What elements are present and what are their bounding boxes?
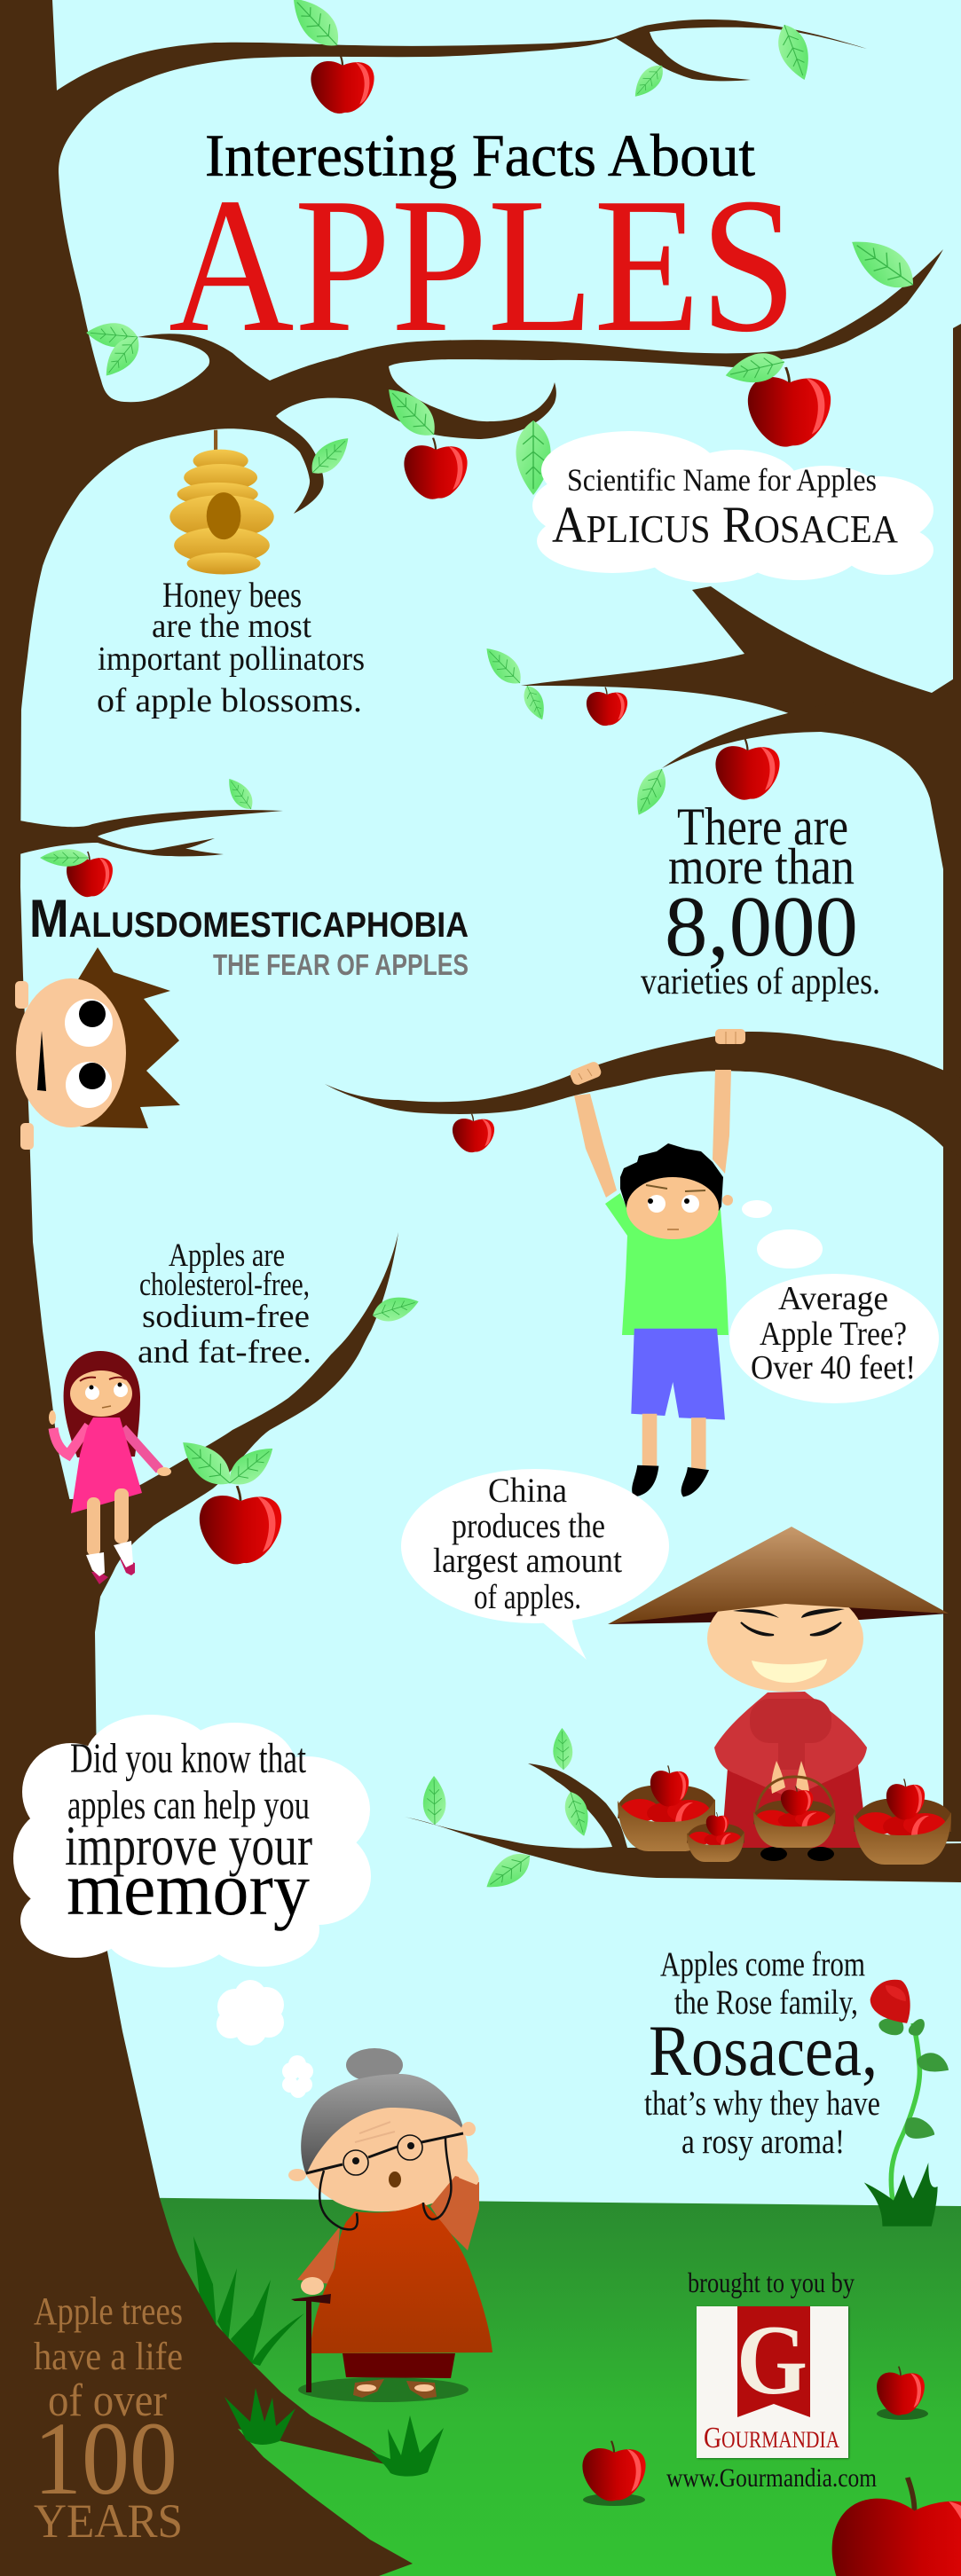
title word: APPLES: APPLES xyxy=(169,159,797,373)
text: apple tree life span: have a life xyxy=(34,2335,183,2378)
text: varieties fact: There are xyxy=(677,797,848,856)
apple on ground: center xyxy=(582,2441,646,2506)
speech bubble: China: largest amount xyxy=(433,1542,622,1580)
text: apple tree life span: 100 xyxy=(34,2400,177,2517)
right side branch with small apple xyxy=(521,324,961,1842)
text: apple tree life span: of over xyxy=(48,2376,167,2426)
text: honey bees fact xyxy=(97,575,365,719)
grass tufts on ground xyxy=(224,2388,444,2477)
text: cholesterol fact: and fat-free. xyxy=(138,1334,311,1370)
leaves on branches xyxy=(40,0,923,1897)
speech bubble: average apple tree: Over 40 feet! xyxy=(751,1349,916,1386)
text: rose family fact: Rosacea, xyxy=(649,2010,878,2091)
apple: boy branch xyxy=(453,1114,494,1152)
title xyxy=(169,122,797,373)
grandmother xyxy=(288,2048,492,2402)
text: honey bees fact: of apple blossoms. xyxy=(97,682,362,719)
text: rose family fact: a rosy aroma! xyxy=(681,2123,845,2161)
Chinese farmer xyxy=(608,1527,949,1861)
text: rose family fact: the Rose family, xyxy=(674,1983,858,2022)
text: cholesterol fact: Apples are xyxy=(169,1237,285,1274)
speech bubble: average apple tree xyxy=(729,1274,939,1403)
Gourmandia logo xyxy=(697,2305,848,2458)
text: Aplicus Rosacea: APLICUS ROSACEA xyxy=(552,496,898,554)
text: rose family fact: that’s why they have xyxy=(644,2085,880,2123)
apple: center branch xyxy=(404,438,468,499)
cloud: scientific name xyxy=(532,431,933,583)
apple: small right branch xyxy=(587,687,627,726)
speech bubble: China: of apples. xyxy=(474,1578,581,1616)
large apple bottom corner xyxy=(832,2478,961,2576)
text: apple tree life span: Apple trees xyxy=(34,2289,183,2333)
heading: Malusdomesticaphobia: MALUSDOMESTICAPHOBIA xyxy=(29,889,469,948)
apple baskets xyxy=(618,1765,951,1865)
text: apple tree life span xyxy=(34,2289,183,2548)
title line: Interesting Facts About: Interesting Facts About xyxy=(205,122,755,189)
speech bubble: average apple tree: Apple Tree? xyxy=(760,1315,907,1353)
apple: girl branch xyxy=(200,1486,281,1564)
speech bubble: average apple tree: Average xyxy=(778,1280,888,1317)
speech bubble: China: produces the xyxy=(452,1507,605,1545)
text: rose family fact xyxy=(644,1945,880,2161)
subheading: the fear of apples: THE FEAR OF APPLES xyxy=(213,948,469,981)
text: cholesterol fact: cholesterol-free, xyxy=(139,1267,310,1303)
text: honey bees fact: are the most xyxy=(152,608,311,645)
apple: top branch xyxy=(311,54,374,114)
speech bubble: China xyxy=(401,1469,669,1660)
grass tuft beside trunk xyxy=(193,2236,304,2367)
branch with boy hanging xyxy=(325,1032,961,1158)
beehive xyxy=(169,430,274,574)
text: varieties fact: 8,000 xyxy=(665,879,858,975)
text: apple tree life span: YEARS xyxy=(34,2494,183,2548)
apple: above 8,000 fact xyxy=(715,739,780,800)
peeking boy xyxy=(15,947,180,1150)
text: cholesterol fact: sodium-free xyxy=(142,1299,310,1335)
text: varieties fact xyxy=(641,797,880,1002)
speech bubble: China: China xyxy=(488,1472,567,1510)
text: improve your: improve your xyxy=(65,1814,312,1877)
text: did you know: Did you know that xyxy=(70,1735,306,1782)
text: honey bees fact: Honey bees xyxy=(162,575,302,615)
branch with girl xyxy=(62,1232,398,1597)
cloud: memory fact xyxy=(13,1715,371,1967)
hanging boy xyxy=(569,1029,745,1496)
text: apples can help: apples can help you xyxy=(67,1782,310,1827)
text: cholesterol fact xyxy=(138,1237,311,1370)
Gourmandia logo: G xyxy=(737,2305,807,2415)
girl on branch xyxy=(49,1351,171,1584)
thought dots near boy xyxy=(742,1200,823,1268)
apple: left small branch xyxy=(67,852,113,897)
thought clouds near grandma xyxy=(217,1980,313,2098)
text: Scientific Name for Apples: Scientific Name for Apples xyxy=(567,462,877,498)
text: varieties fact: more than xyxy=(668,837,855,895)
rose xyxy=(864,1980,949,2227)
credit: brought to you by: brought to you by xyxy=(688,2266,855,2298)
Gourmandia logo: GOURMANDIA xyxy=(704,2422,839,2454)
small left branch xyxy=(20,810,283,856)
grass field xyxy=(0,2196,961,2576)
credit: website: www.Gourmandia.com xyxy=(666,2463,877,2493)
text: varieties fact: varieties of apples. xyxy=(641,962,880,1002)
text: rose family fact: Apples come from xyxy=(660,1945,865,1983)
apple on ground: right xyxy=(877,2367,928,2420)
text: fear of apples xyxy=(29,889,469,981)
branch with baskets xyxy=(399,1763,961,1882)
text: memory: memory xyxy=(67,1846,310,1931)
text: honey bees fact: important pollinators xyxy=(98,640,365,678)
apple: right of title xyxy=(748,367,831,447)
